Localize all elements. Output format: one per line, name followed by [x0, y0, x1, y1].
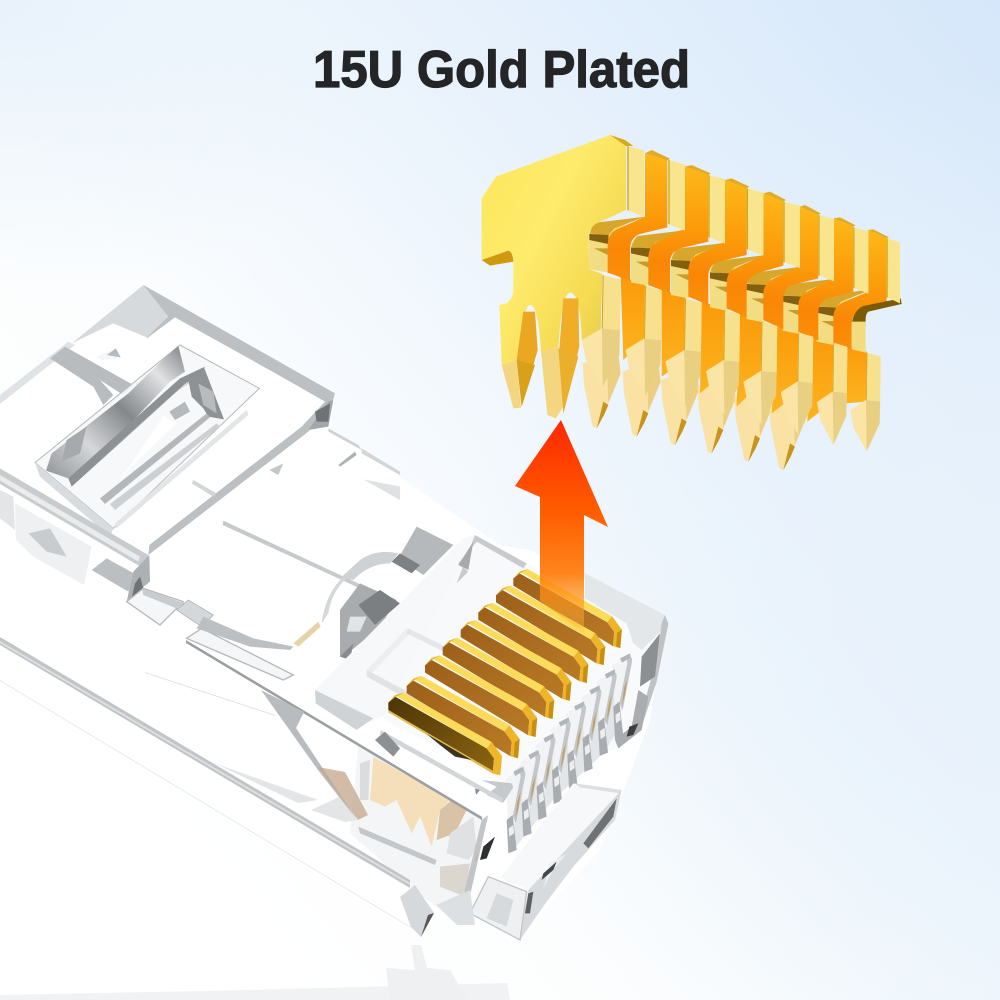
lower connector edges [0, 637, 482, 937]
lower contact box [500, 783, 622, 890]
beige contact plate [370, 757, 467, 847]
front two plate teeth [502, 347, 578, 418]
orange lower columns [621, 277, 867, 422]
front opening frame [383, 535, 668, 787]
latch window [35, 345, 259, 528]
translucent fins [612, 653, 632, 740]
gold pin comb [482, 135, 902, 470]
outer corner right [585, 573, 668, 650]
top flap [315, 535, 525, 722]
front face panel [350, 745, 483, 925]
right top edge [328, 428, 362, 450]
chrome latch clip [46, 346, 185, 486]
front rail [0, 468, 148, 568]
rear latch section [0, 285, 400, 680]
last tab [852, 298, 902, 324]
mechanism shown through housing [315, 527, 668, 940]
rear row of tooth tips [583, 352, 807, 470]
orange arrow [515, 420, 608, 633]
reflection under connector [0, 945, 510, 1000]
striped band [50, 347, 133, 405]
title: 15U Gold Plated [313, 41, 690, 99]
fin backdrop [507, 657, 627, 850]
front top bar [380, 718, 513, 803]
connector body [0, 287, 665, 945]
gold contact pins [513, 569, 622, 648]
slot blocks [589, 217, 872, 345]
clear RJ45 connector [0, 285, 668, 945]
orange S-shaped contacts [608, 153, 887, 351]
orange column caps [645, 150, 889, 238]
latch top rim [143, 285, 335, 555]
central lines and arc [223, 521, 362, 588]
yellow main plate [482, 135, 626, 365]
lower tiles and tooth tips [582, 275, 881, 451]
upper light tiles [627, 146, 900, 303]
right front edge [457, 815, 488, 925]
step tabs [127, 588, 183, 625]
front pin [388, 693, 502, 775]
